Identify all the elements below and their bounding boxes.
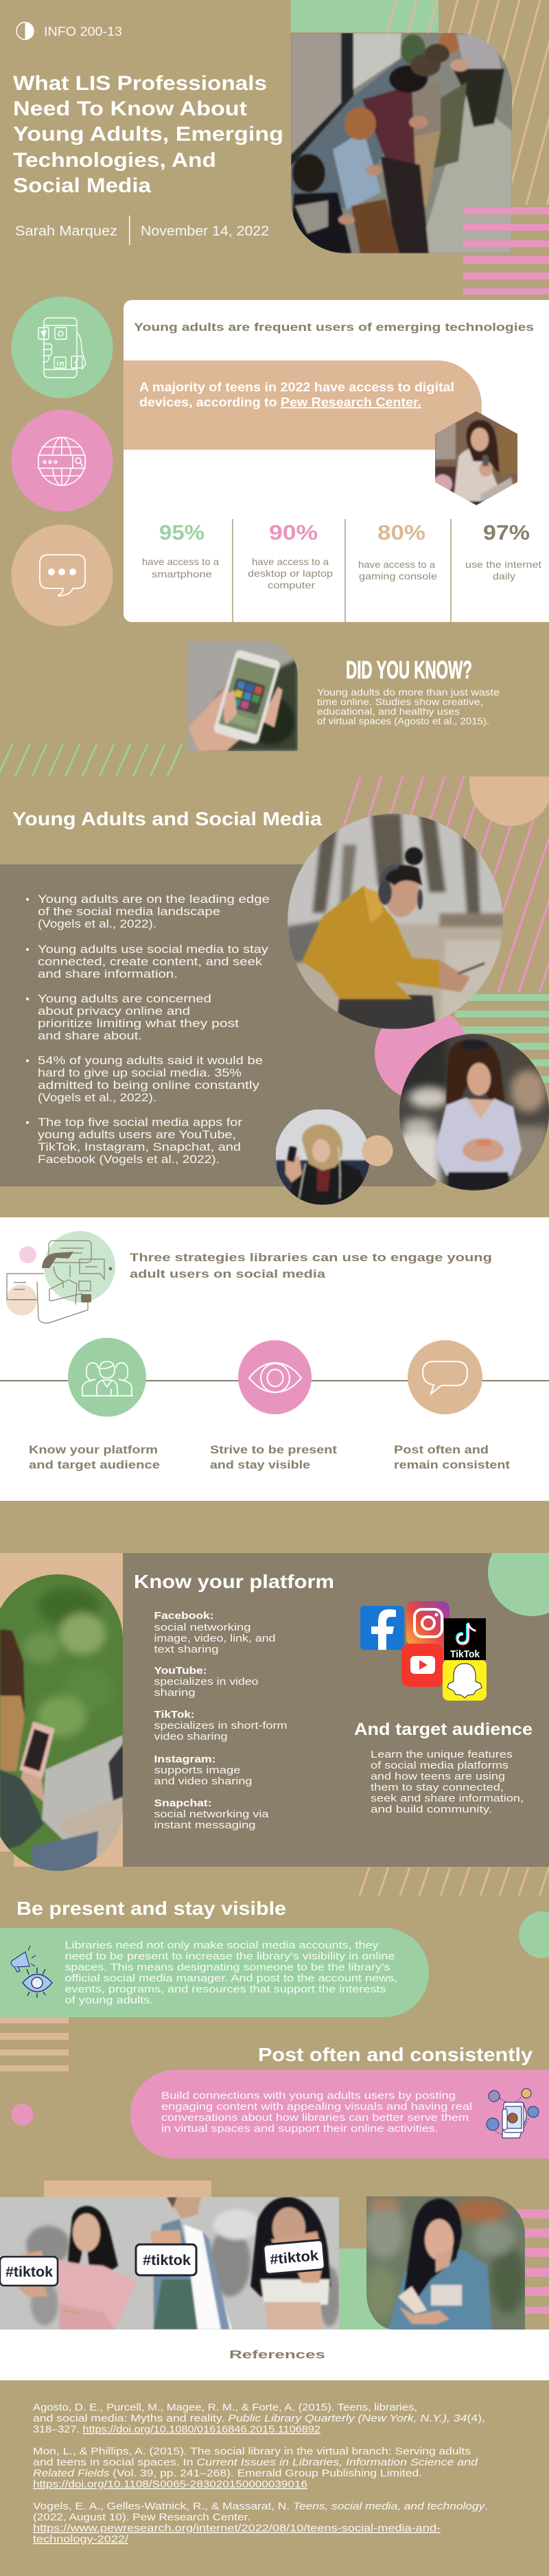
author and date: November 14, 2022: [141, 224, 269, 239]
platform: Snapchat: instant messaging: [154, 1820, 255, 1831]
reference: Vogels: https://www.pewresearch.org/internet/2022/08/10/teens-social-media-and-: [33, 2523, 441, 2534]
bullet: 54 percent: (Vogels et al., 2022).: [38, 1091, 156, 1104]
panel: teens and devices card: [124, 300, 549, 622]
bullet: top five apps: [26, 1116, 242, 1166]
bullet: leading edge: of the social media landscape: [38, 905, 220, 918]
panel: references heading: [0, 2330, 549, 2380]
reference: Mon: Mon, L., & Phillips, A. (2015). The social library in the virtual branch: Serving adults: [33, 2446, 471, 2457]
photo: group of young adults using phones: [291, 32, 512, 253]
references list: [33, 2402, 488, 2545]
icon: TikTok: TikTok: [450, 1648, 480, 1660]
bullet: leading edge: Young adults are on the leading edge: [38, 893, 270, 906]
icon: Instagram: [406, 1601, 449, 1646]
callout: green pill: Libraries need not only make social media accounts, they: [65, 1940, 379, 1951]
phone: right tiktok: [263, 2240, 325, 2275]
header section: [13, 0, 549, 295]
stat: 95% smartphone: 95%: [159, 520, 205, 544]
target audience body: Learn the unique features: [371, 1749, 513, 1760]
platform: YouTube: sharing: [154, 1688, 195, 1699]
course label: INFO 200-13: [44, 25, 122, 38]
strategy: know your platform: Know your platform: [29, 1443, 158, 1456]
platform: Facebook: social networking: [154, 1622, 251, 1633]
bullet: top five apps: The top five social media apps for: [38, 1116, 242, 1129]
target audience body: and how teens are using: [371, 1771, 505, 1782]
strategy: be present: [210, 1340, 337, 1471]
phone: center tiktok: #tiktok: [143, 2253, 191, 2268]
panel: know your platform: [0, 1528, 549, 1871]
bullet: privacy: about privacy online and: [38, 1004, 190, 1017]
callout band: devices, according to Pew Research Center.: [139, 395, 421, 409]
platform: Facebook: Facebook:: [154, 1610, 214, 1622]
heading: Young adults are frequent users of emerging technologies: [134, 321, 534, 334]
body text: of virtual spaces (Agosto et al., 2015).: [317, 716, 489, 726]
stat: 90% desktop or laptop: computer: [268, 579, 315, 590]
target audience body: and build community.: [371, 1804, 492, 1815]
icon: phone with social apps: [11, 297, 113, 398]
reference: Agosto: [33, 2402, 485, 2435]
icon: group of people: [68, 1337, 146, 1417]
stat: 90% desktop or laptop: have access to a: [252, 556, 329, 567]
reference: Mon: and teens in social spaces. In Current Issues in Libraries, Information Science and: [33, 2457, 478, 2468]
bullet: privacy: prioritize limiting what they post: [38, 1017, 239, 1030]
platform: YouTube: [154, 1665, 258, 1699]
target audience body: [371, 1749, 524, 1815]
decorative pink circle: [375, 1006, 469, 1101]
title: Young Adults, Emerging: [13, 123, 283, 146]
callout band: [124, 360, 482, 450]
bullet: 54 percent: admitted to being online constantly: [38, 1079, 260, 1092]
decorative green half circle: [488, 1553, 549, 1616]
stat: 90% desktop or laptop: 90%: [269, 520, 318, 544]
platform: Facebook: [154, 1610, 276, 1655]
title: What LIS Professionals: [13, 72, 267, 95]
icon: globe with search bar: [11, 410, 113, 511]
platform: TikTok: TikTok:: [154, 1709, 195, 1721]
bullet: stay connected: and share information.: [38, 967, 178, 980]
title: [13, 72, 283, 197]
decorative green block: [339, 2249, 414, 2330]
title: Social Media: [13, 174, 151, 197]
photo: three people holding tiktok phones: [0, 2197, 340, 2330]
icon: Snapchat: [443, 1659, 487, 1701]
strategy: post often: [394, 1340, 510, 1471]
bullet: 54 percent: 54% of young adults said it would be: [38, 1054, 263, 1067]
icon: half circle logo: [16, 22, 34, 40]
bullet: top five apps: TikTok, Instagram, Snapchat, and: [38, 1140, 241, 1153]
icon: YouTube: [401, 1644, 443, 1687]
title: Need To Know About: [13, 97, 247, 120]
body text: educational, and healthy uses: [317, 706, 460, 717]
bullet: stay connected: [26, 943, 269, 980]
bullet: privacy: [26, 992, 239, 1042]
photo: woman in blue sweater with phone: [364, 2196, 526, 2330]
decorative green block: [291, 0, 439, 32]
phone: center tiktok: [136, 2244, 196, 2275]
stat: 97% internet daily: [465, 520, 541, 582]
reference: Vogels: [33, 2501, 488, 2545]
bullet: top five apps: young adults users are YouTube,: [38, 1128, 236, 1141]
body text: time online. Studies show creative,: [317, 697, 483, 707]
platform: Instagram: [154, 1753, 253, 1787]
photo: hand holding smartphone: [188, 641, 298, 751]
phone: right tiktok: #tiktok: [269, 2248, 319, 2268]
callout: green pill: [0, 1928, 429, 2017]
icon: eye: [238, 1340, 312, 1414]
bullet: stay connected: connected, create content, and seek: [38, 955, 263, 968]
callout: pink pill: [130, 2070, 549, 2159]
section: be present and stay visible: [0, 1898, 549, 2017]
reference: Mon: Related Fields (Vol. 39, pp. 241–268). Emerald Group Publishing Limited.: [33, 2468, 422, 2479]
phone: left tiktok: [0, 2257, 58, 2286]
platform: YouTube: specializes in video: [154, 1677, 258, 1688]
stat: 80% gaming console: [358, 520, 437, 582]
heading: and target audience: And target audience: [354, 1720, 533, 1739]
callout: green pill: events, programs, and resources that support the interests: [65, 1984, 386, 1995]
stat: 97% internet daily: use the internet: [465, 559, 541, 570]
phone: left tiktok: #tiktok: [5, 2264, 53, 2280]
author and date: Sarah Marquez: [15, 224, 117, 239]
heading: Young Adults and Social Media: [12, 808, 322, 829]
body text: [317, 687, 500, 726]
decorative pink stripes: [516, 2209, 549, 2314]
target audience body: them to stay connected,: [371, 1782, 504, 1793]
callout: pink pill: in virtual spaces and support their online activities.: [161, 2124, 439, 2135]
stat: 90% desktop or laptop: desktop or laptop: [248, 568, 333, 579]
stat: 95% smartphone: smartphone: [152, 568, 212, 579]
heading: Post often and consistently: [258, 2044, 533, 2065]
photo: man in yellow hoodie with headphones: [287, 814, 504, 1029]
bullet: stay connected: Young adults use social media to stay: [38, 943, 269, 956]
icon: eye: [23, 1968, 52, 1998]
icon: Facebook: [360, 1606, 404, 1650]
decorative green blob: [519, 1911, 549, 1958]
reference: Mon: [33, 2446, 478, 2490]
strategy: post often: Post often and: [394, 1443, 489, 1456]
stat: 90% desktop or laptop: [248, 520, 333, 590]
strategy: be present: Strive to be present: [210, 1443, 337, 1456]
platform: Instagram: supports image: [154, 1765, 240, 1776]
platform: Instagram: Instagram:: [154, 1753, 215, 1765]
platform: Snapchat: Snapchat:: [154, 1797, 211, 1809]
callout: green pill: spaces. This means designating someone to be the library's: [65, 1962, 390, 1973]
stats row: [142, 519, 541, 622]
panel: bullet list background: [0, 864, 436, 1186]
stat: 95% smartphone: have access to a: [142, 556, 219, 567]
stat: 97% internet daily: 97%: [483, 520, 530, 544]
heading: Three strategies libraries can use to engage young: [130, 1251, 492, 1264]
platform: Facebook: image, video, link, and: [154, 1633, 276, 1644]
decorative peach block: [44, 2181, 211, 2197]
stat: 80% gaming console: 80%: [377, 520, 425, 544]
icon: chat bubble: [11, 525, 113, 626]
photo: woman looking at phone: [399, 1034, 549, 1191]
icon: megaphone: [11, 1946, 36, 1972]
target audience body: seek and share information,: [371, 1793, 524, 1804]
platform: YouTube: YouTube:: [154, 1665, 207, 1677]
strategy: post often: remain consistent: [394, 1458, 510, 1471]
decorative peach half circle: [469, 777, 549, 826]
bullet: leading edge: [26, 893, 270, 930]
target audience body: of social media platforms: [371, 1760, 509, 1771]
reference: Mon: https://doi.org/10.1108/S0065-283020150000039016: [33, 2479, 307, 2490]
bullet: privacy: Young adults are concerned: [38, 992, 211, 1005]
strategy: know your platform: and target audience: [29, 1458, 160, 1471]
bullet list: [26, 893, 270, 1166]
photo: person on grass with phone and laptop: [0, 1574, 123, 1871]
callout: pink pill: conversations about how libraries can better serve them: [161, 2113, 469, 2124]
icon: TikTok: [444, 1618, 486, 1660]
callout: pink pill: Build connections with young adults users by posting: [161, 2091, 456, 2102]
callout: green pill: of young adults.: [65, 1995, 154, 2006]
callout: green pill: need to be present to increase the library's visibility in online: [65, 1951, 395, 1962]
platform: TikTok: specializes in short-form: [154, 1721, 287, 1732]
callout band: A majority of teens in 2022 have access to digital: [139, 380, 454, 394]
panel: references heading: References: [229, 2348, 325, 2361]
title: Technologies, And: [13, 149, 216, 172]
callout: green pill: official social media manager. And post to the account news,: [65, 1973, 398, 1984]
reference: Agosto: Agosto, D. E., Purcell, M., Magee, R. M., & Forte, A. (2015). Teens, libraries,: [33, 2402, 417, 2413]
bullet: privacy: and share about.: [38, 1029, 142, 1042]
icon circles column: [11, 297, 113, 626]
illustration: person with phone and speech bubbles: [6, 1231, 115, 1323]
heading: Know your platform: [134, 1571, 334, 1592]
reference: Agosto: and social media: Myths and reality. Public Library Quarterly (New York, N.Y.), 34 (4),: [33, 2413, 485, 2424]
social media logos: [360, 1601, 487, 1701]
platform: Snapchat: [154, 1797, 270, 1831]
platform: Snapchat: social networking via: [154, 1809, 270, 1820]
author and date: [15, 216, 269, 245]
photo: man with curly hair and phone: [276, 1109, 371, 1206]
stat: 97% internet daily: daily: [493, 571, 515, 582]
decorative pink stripes: [463, 207, 549, 295]
heading: [130, 1251, 492, 1280]
bullet: top five apps: Facebook (Vogels et al., 2022).: [38, 1153, 220, 1166]
decorative pink dot: [11, 2104, 33, 2126]
icon: phone with social network: [487, 2089, 539, 2138]
stat: 80% gaming console: gaming console: [359, 571, 437, 582]
callout: pink pill: engaging content with appealing visuals and having real: [161, 2102, 472, 2113]
bullet: 54 percent: hard to give up social media. 35%: [38, 1066, 242, 1079]
platform: Instagram: and video sharing: [154, 1776, 253, 1787]
platform: TikTok: video sharing: [154, 1732, 228, 1743]
bullet: leading edge: (Vogels et al., 2022).: [38, 917, 156, 930]
body text: Young adults do more than just waste: [317, 687, 500, 698]
platform list: [154, 1610, 287, 1831]
section: post often and consistently: [11, 2044, 549, 2159]
photo: woman with smartphone: [433, 411, 517, 505]
platform: Facebook: text sharing: [154, 1644, 218, 1655]
icon: speech bubble: [408, 1340, 482, 1414]
did you know block: [188, 641, 500, 751]
strategy: be present: and stay visible: [210, 1458, 310, 1471]
section: young adults and social media: [0, 777, 549, 1206]
strategy: know your platform: [29, 1337, 160, 1471]
decorative green stripes: [453, 994, 549, 1083]
bottom photo collage: [0, 2181, 549, 2330]
stat: 95% smartphone: [142, 520, 219, 579]
reference: Vogels: (2022, August 10). Pew Research Center.: [33, 2512, 250, 2523]
bullet: 54 percent: [26, 1054, 263, 1104]
platform: TikTok: [154, 1709, 287, 1743]
heading: did you know: DID YOU KNOW?: [346, 656, 472, 684]
reference: Vogels: technology-2022/: [33, 2534, 129, 2545]
heading: Be present and stay visible: [16, 1898, 286, 1919]
decorative peach dot: [362, 1136, 393, 1166]
heading: adult users on social media: [130, 1267, 326, 1280]
reference: Vogels: Vogels, E. A., Gelles-Watnick, R., & Massarat, N. Teens, social media, and technology .: [33, 2501, 488, 2512]
stat: 80% gaming console: have access to a: [358, 559, 435, 570]
reference: Agosto: 318–327. https://doi.org/10.1080/01616846.2015.1106892: [33, 2424, 320, 2435]
panel: three strategies: [0, 1217, 549, 1501]
